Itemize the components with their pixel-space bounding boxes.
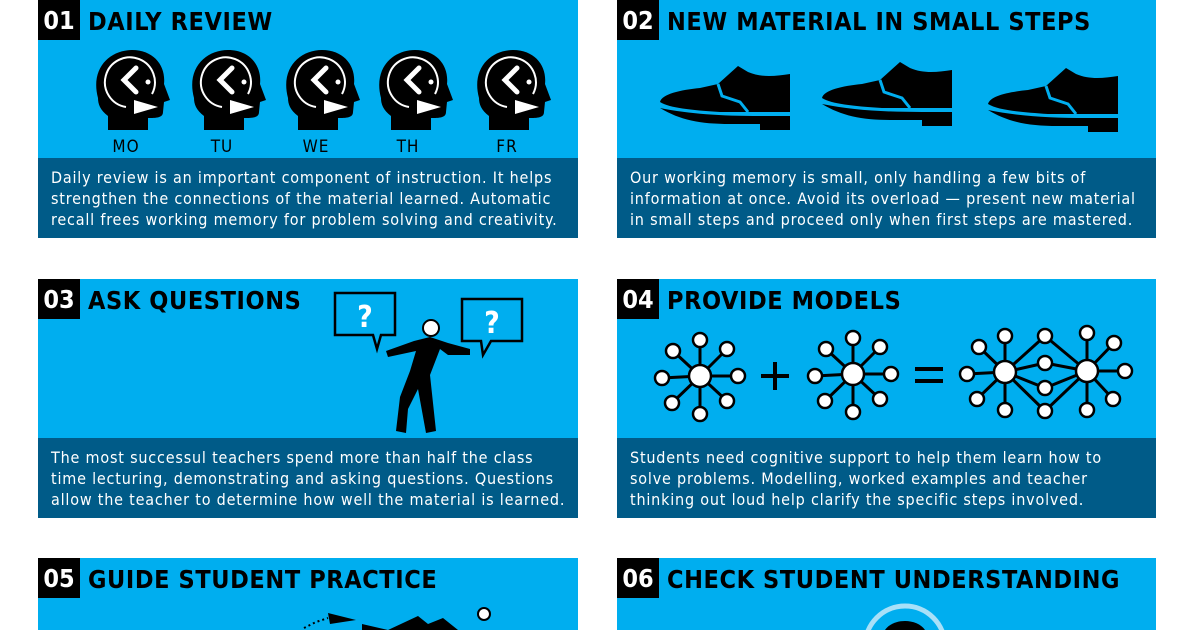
panel: 01 daily review [38, 0, 578, 238]
title check understanding: CHECK STUDENT UNDERSTANDING [667, 565, 1120, 594]
text band 01: recall frees working memory for problem solving and creativity. [51, 210, 557, 229]
icon: shoes [660, 62, 1118, 132]
title new material: NEW MATERIAL IN SMALL STEPS [667, 7, 1091, 36]
number 01: 01 [43, 6, 75, 35]
panel: 02 new material [617, 0, 1156, 238]
text band 02: in small steps and proceed only when first steps are mastered. [630, 210, 1133, 229]
title guide student practice: GUIDE STUDENT PRACTICE [88, 565, 437, 594]
text band 01: strengthen the connections of the material learned. Automatic [51, 189, 551, 208]
number 02: 02 [622, 6, 654, 35]
icon: heads with clock: FR [496, 137, 518, 157]
number 03: 03 [43, 285, 75, 314]
number 06 [617, 558, 659, 598]
icon: heads with clock [96, 50, 551, 157]
title ask questions: ASK QUESTIONS [88, 286, 301, 315]
title provide models: PROVIDE MODELS [667, 286, 901, 315]
text band 02: information at once. Avoid its overload — present new material [630, 189, 1136, 208]
icon: circle [866, 604, 944, 630]
text band 04 [617, 438, 1156, 518]
number 04 [617, 279, 659, 319]
text band 01 [38, 158, 578, 238]
title daily review: DAILY REVIEW [88, 7, 273, 36]
text band 03: The most successul teachers spend more than half the class [51, 448, 533, 467]
panel: 03 ask questions [38, 279, 578, 518]
number 05: 05 [43, 564, 75, 593]
text band 03 [38, 438, 578, 518]
number 02 [617, 0, 659, 40]
panel: 05 guide student practice [38, 558, 578, 630]
text band 01: Daily review is an important component of instruction. It helps [51, 168, 552, 187]
number 05 [38, 558, 80, 598]
panel: 06 check student understanding [617, 558, 1156, 630]
icon: person with question bubbles [334, 292, 524, 433]
icon: heads with clock: WE [303, 137, 329, 157]
icon: heads with clock: TH [396, 137, 419, 157]
text band 04: Students need cognitive support to help them learn how to [630, 448, 1102, 467]
diagram: networks [654, 324, 1134, 422]
icon: person with question bubbles: ? [357, 300, 373, 335]
text band 04: thinking out loud help clarify the specific steps involved. [630, 490, 1084, 509]
number 06: 06 [622, 564, 654, 593]
text band 02: Our working memory is small, only handling a few bits of [630, 168, 1086, 187]
number 04: 04 [622, 285, 654, 314]
text band 04: solve problems. Modelling, worked examples and teacher [630, 469, 1088, 488]
icon: person with question bubbles: ? [484, 306, 500, 341]
icon: heads with clock: TU [210, 137, 233, 157]
icon: heads with clock: MO [112, 137, 140, 157]
number 01 [38, 0, 80, 40]
icon: practice figure [304, 607, 491, 630]
text band 03: allow the teacher to determine how well the material is learned. [51, 490, 565, 509]
panel: 04 provide models [617, 279, 1156, 518]
number 03 [38, 279, 80, 319]
text band 03: time lecturing, demonstrating and asking questions. Questions [51, 469, 554, 488]
text band 02 [617, 158, 1156, 238]
